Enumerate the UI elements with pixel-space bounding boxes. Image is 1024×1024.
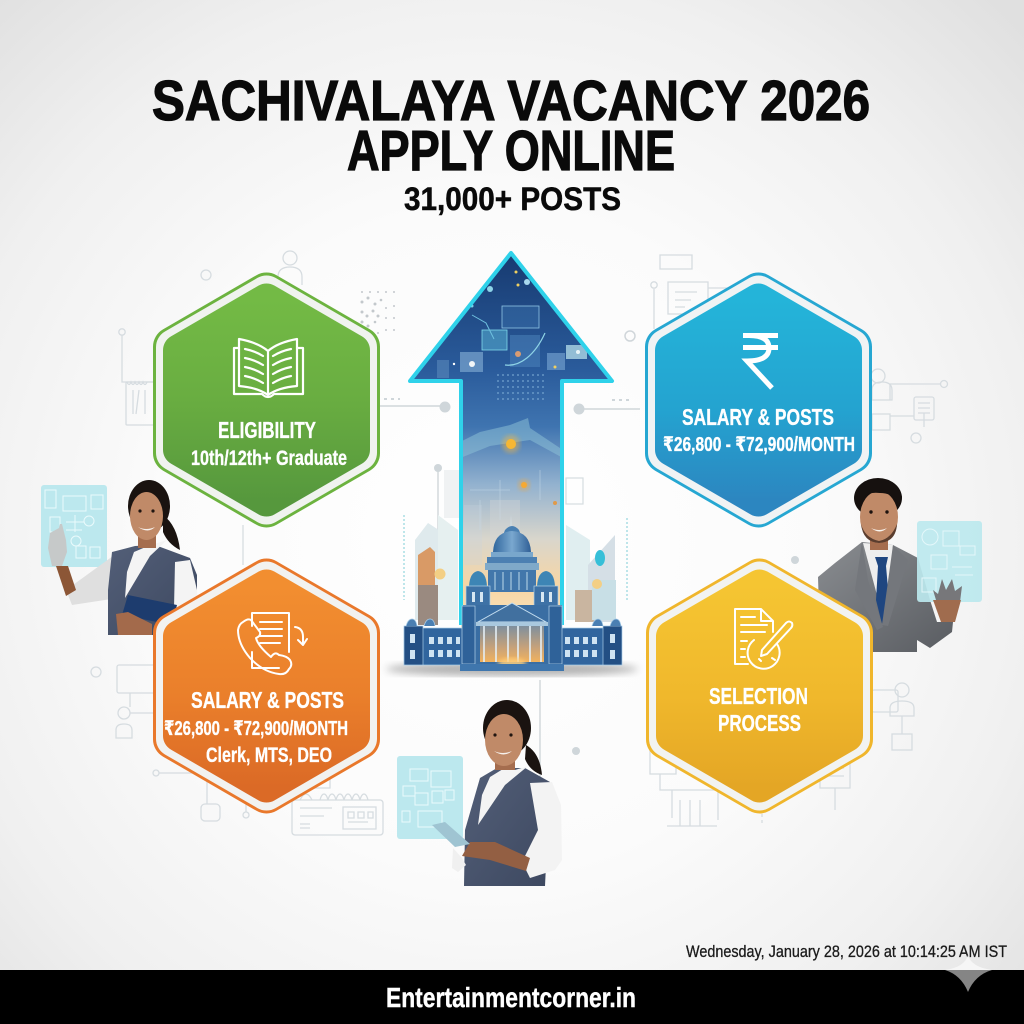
icon: document and pencil	[735, 609, 792, 669]
selection text: PROCESS	[718, 710, 801, 736]
eligibility text: ELIGIBILITY	[218, 417, 316, 443]
main dome	[485, 515, 539, 592]
background line icons	[91, 251, 948, 835]
vest	[108, 545, 197, 635]
ground shadow	[386, 662, 638, 676]
salary text orange: ₹26,800 - ₹72,900/MONTH	[164, 718, 348, 740]
dotted data cluster	[360, 291, 395, 334]
right sleeve	[174, 560, 198, 612]
person: woman with tablet and panel	[397, 700, 562, 886]
salary text orange	[164, 687, 348, 767]
shirt	[478, 766, 528, 825]
shirt	[125, 540, 167, 598]
arrow interior: glowing stars	[453, 270, 580, 505]
head and hair	[128, 480, 180, 550]
title	[152, 69, 870, 217]
salary text blue	[663, 404, 855, 456]
holographic panel	[397, 756, 463, 839]
hexagon: salary and posts blue	[663, 292, 855, 508]
central block and portico	[460, 603, 564, 671]
flanking towers	[466, 571, 558, 606]
person: woman pointing at a panel	[41, 480, 198, 635]
footer bar	[0, 970, 1024, 1024]
footer bar: Entertainmentcorner.in	[386, 982, 636, 1013]
side wings	[404, 619, 622, 665]
vest	[464, 768, 550, 886]
salary text orange: SALARY & POSTS	[191, 687, 344, 713]
suit	[818, 542, 953, 652]
arrow interior: digital panels	[437, 306, 587, 565]
salary text orange: Clerk, MTS, DEO	[206, 744, 332, 767]
hexagon: eligibility	[173, 292, 360, 508]
skyline behind the arrow	[415, 470, 616, 625]
hologram panel	[917, 521, 982, 602]
hand	[933, 579, 962, 622]
selection text: SELECTION	[709, 683, 808, 709]
panel lines	[922, 529, 975, 592]
salary text blue: SALARY & POSTS	[682, 404, 834, 430]
head and hair	[483, 700, 542, 775]
forearm and hands	[462, 842, 530, 871]
book and hand	[122, 595, 177, 625]
government building	[386, 515, 638, 676]
eligibility text: 10th/12th+ Graduate	[191, 447, 347, 470]
hexagon: selection process	[666, 578, 853, 794]
eligibility text	[191, 417, 347, 470]
holographic panel	[41, 485, 107, 567]
title: SACHIVALAYA VACANCY 2026	[152, 69, 870, 133]
icon: phone and document	[238, 613, 307, 674]
lapels	[855, 542, 908, 630]
sparkle watermark	[945, 955, 992, 992]
salary text blue: ₹26,800 - ₹72,900/MONTH	[663, 434, 855, 456]
arm and hand	[66, 556, 118, 605]
icon: open book	[234, 339, 303, 397]
icon: rupee	[743, 336, 778, 388]
hexagon: salary and posts orange	[164, 578, 360, 794]
title: APPLY ONLINE	[347, 119, 675, 183]
selection text	[709, 683, 808, 736]
title: 31,000+ POSTS	[404, 181, 621, 217]
tablet	[432, 822, 470, 847]
person: man in suit with panel	[818, 478, 982, 652]
central arrow	[408, 250, 614, 628]
decorative connector dots and lines	[380, 331, 799, 800]
sleeve	[522, 782, 562, 878]
head and hair	[854, 478, 902, 550]
shirt and tie	[863, 543, 893, 625]
